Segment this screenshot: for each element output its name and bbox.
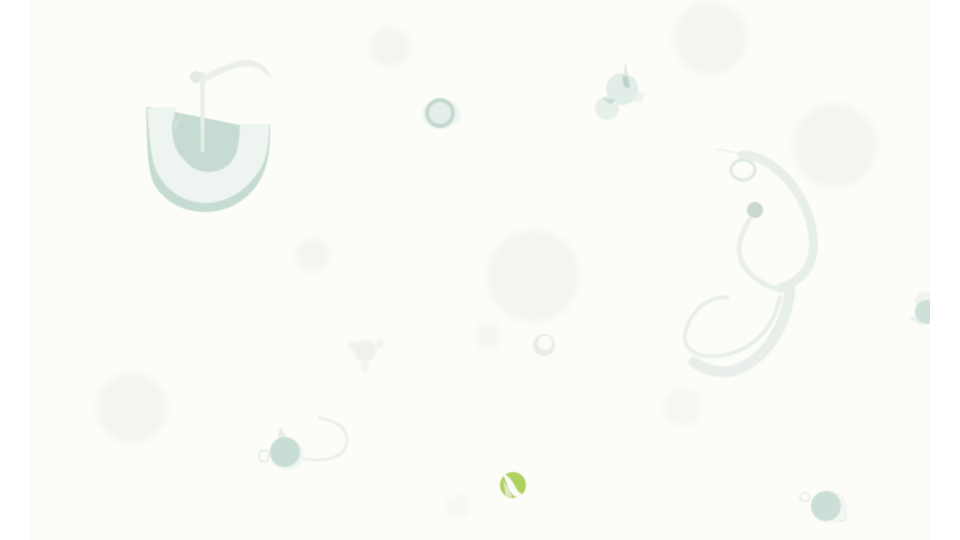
faint blurred circles: [97, 1, 877, 519]
small notch crescent: [174, 116, 183, 130]
icon: bead with loop: [259, 418, 347, 470]
U shape face: [147, 107, 269, 203]
icon: stethoscope ball: [747, 202, 763, 218]
inner crescent: [178, 134, 238, 172]
tube bulb: [190, 71, 202, 83]
upper arc: [742, 155, 813, 288]
U shape shadow: [146, 107, 270, 212]
loop: [685, 297, 780, 356]
icon: ring bead: [422, 98, 460, 129]
icon: lower right bead: [800, 491, 847, 523]
icon: clipped edge bead: [910, 292, 930, 324]
icon: green bead: [500, 472, 526, 498]
icon: paired beads: [595, 62, 645, 120]
small ring: [731, 160, 755, 180]
neck to ball: [739, 219, 782, 290]
icon: faint flower shape: [348, 340, 384, 371]
wire hair: [716, 149, 775, 168]
lower thick sweep: [694, 290, 790, 372]
tube stem: [200, 72, 205, 152]
icon: small white bead: [533, 334, 555, 356]
tube arc: [196, 60, 272, 82]
icon: U-shaped magnet with tube: [146, 60, 272, 212]
icon: stethoscope curve: [685, 149, 813, 372]
